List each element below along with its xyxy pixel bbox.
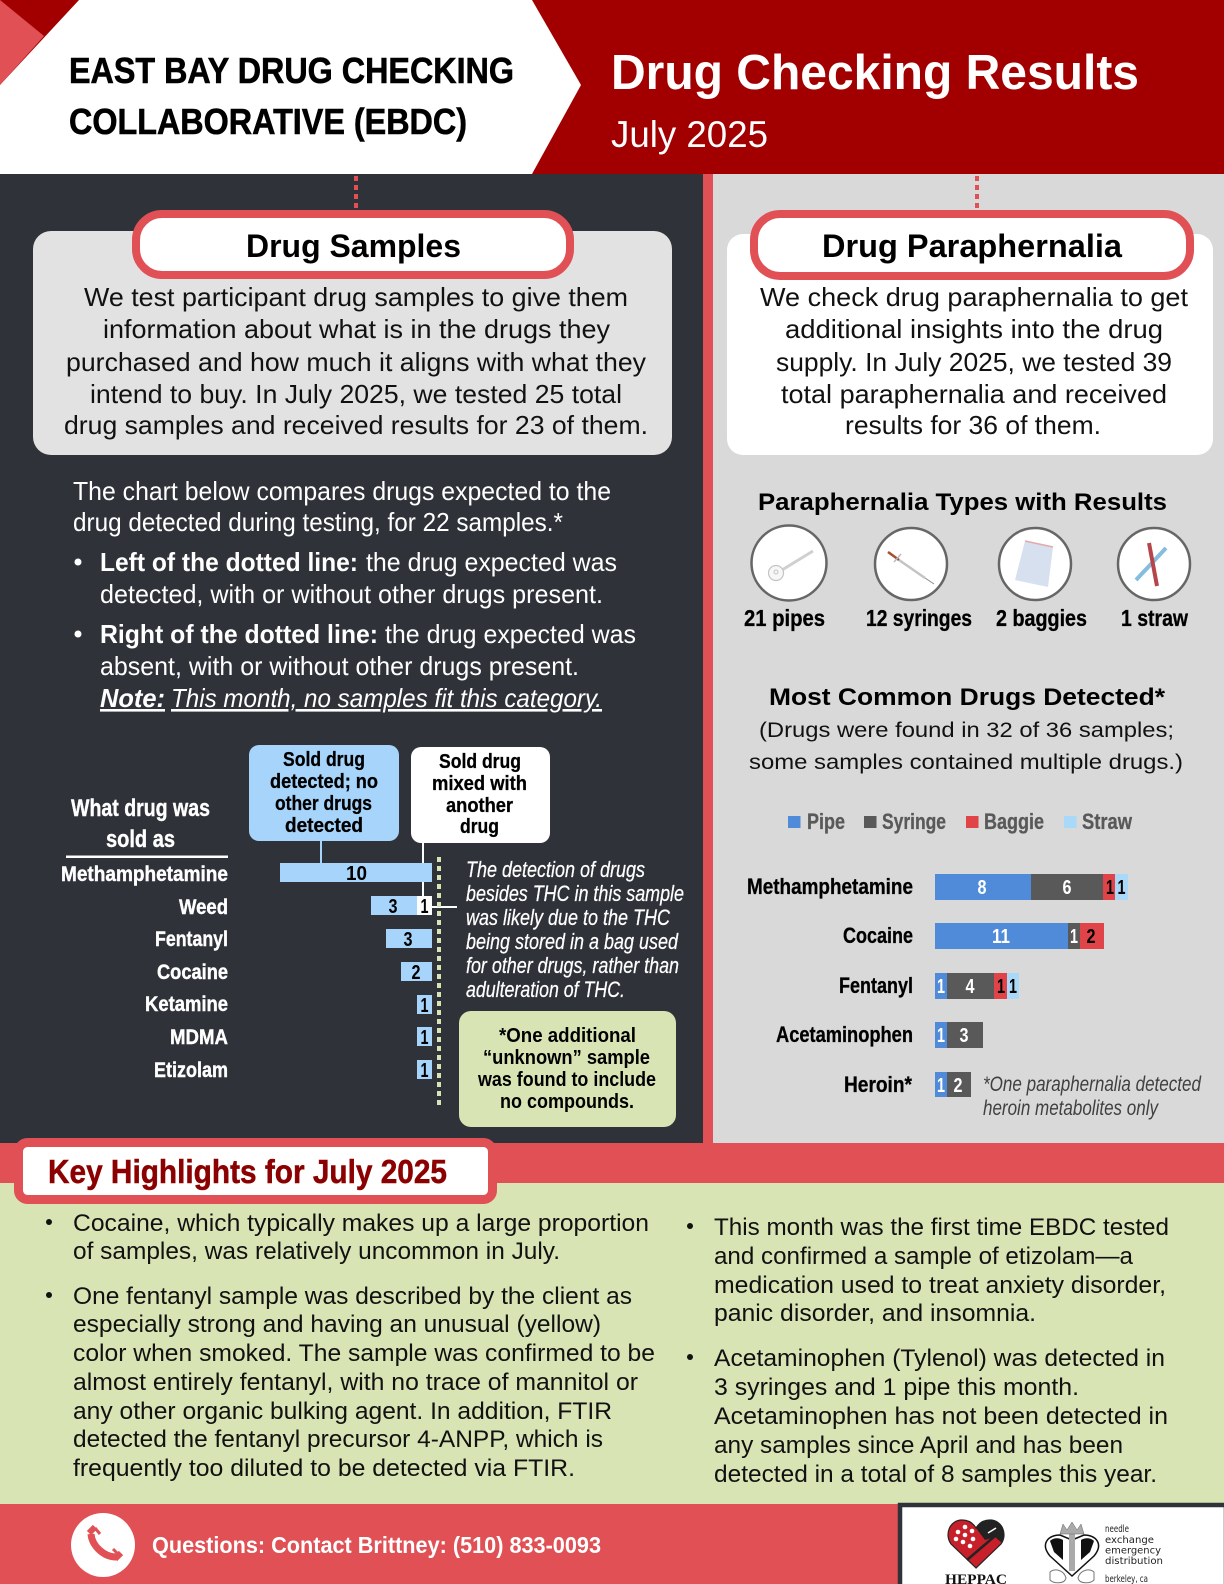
intro box: results for 36 of them. [845, 410, 1101, 440]
bar values: 1 [1009, 976, 1017, 998]
highlights left column: detected the fentanyl precursor 4-ANPP, which is [73, 1426, 603, 1453]
bar values: 1 [1106, 877, 1114, 899]
highlights left column: One fentanyl sample was described by the client as [73, 1283, 632, 1310]
highlights right column: 3 syringes and 1 pipe this month. [714, 1374, 1079, 1401]
stacked bar legend: Pipe [807, 809, 845, 834]
bar values: 3 [404, 929, 412, 951]
drug labels: Weed [179, 896, 228, 919]
drug labels: Methamphetamine [61, 863, 228, 886]
heading: drug samples: Drug Samples [246, 228, 461, 264]
highlights right column: and confirmed a sample of etizolam—a [714, 1243, 1133, 1270]
highlights right column: Acetaminophen has not been detected in [714, 1403, 1168, 1430]
highlights left column: any other organic bulking agent. In addition, FTIR [73, 1398, 612, 1425]
bar values [937, 877, 1126, 1097]
footnote callout: “unknown” sample [483, 1047, 650, 1069]
chart explanation text [73, 476, 636, 713]
row labels [747, 874, 913, 1097]
organization name: EAST BAY DRUG CHECKING [69, 50, 514, 91]
bars [280, 863, 432, 1079]
logo: needle exchange emblem [1045, 1522, 1099, 1583]
stacked bar legend: Straw [1082, 809, 1133, 834]
highlights left column: especially strong and having an unusual (yellow) [73, 1311, 601, 1338]
highlights right column: any samples since April and has been [714, 1432, 1123, 1459]
logo text: emergency [1105, 1546, 1161, 1556]
highlights left column: color when smoked. The sample was confirmed to be [73, 1340, 655, 1367]
bar values: 4 [966, 976, 975, 998]
panel: drug paraphernalia [713, 174, 1224, 1144]
icon: pipe [752, 526, 826, 600]
bar values: 11 [992, 926, 1010, 948]
bar values: 1 [1118, 877, 1126, 899]
paraphernalia counts: 2 baggies [996, 605, 1087, 631]
drug labels [61, 863, 228, 1082]
row labels: Heroin* [844, 1072, 912, 1097]
paraphernalia counts: 12 syringes [866, 605, 972, 631]
highlights right column: medication used to treat anxiety disorder, [714, 1272, 1166, 1299]
stacked bar legend: Baggie [984, 809, 1044, 834]
stacked bar legend: Syringe [882, 809, 946, 834]
drug labels: MDMA [170, 1026, 228, 1049]
intro box: additional insights into the drug [785, 314, 1163, 344]
chart explanation text: The chart below compares drugs expected to the [73, 476, 611, 506]
bar values: 1 [420, 896, 428, 918]
heroin footnote: heroin metabolites only [983, 1097, 1159, 1120]
row labels: Cocaine [843, 923, 913, 948]
heading: drug samples [136, 214, 570, 275]
highlights left column: almost entirely fentanyl, with no trace of mannitol or [73, 1369, 638, 1396]
stacked bar legend [788, 809, 1133, 834]
heading: paraphernalia types: Paraphernalia Types with Results [758, 489, 1167, 516]
highlights right column: panic disorder, and insomnia. [714, 1300, 1036, 1327]
heading: most common drugs: Most Common Drugs Detected* [769, 684, 1166, 711]
chart explanation text: Note: [100, 683, 165, 713]
heading: key highlights: Key Highlights for July 2025 [48, 1153, 447, 1190]
organization name: COLLABORATIVE (EBDC) [69, 101, 467, 142]
chart explanation text: Right of the dotted line: [100, 619, 378, 649]
row labels: Acetaminophen [776, 1022, 913, 1047]
paraphernalia counts: 21 pipes [744, 605, 825, 631]
chart note about THC: was likely due to the THC [466, 905, 670, 930]
contact text: Questions: Contact Brittney: (510) 833-0093 [152, 1532, 601, 1558]
bar values: 3 [388, 896, 398, 918]
row labels: Methamphetamine [747, 874, 913, 899]
header banner [0, 0, 1224, 174]
intro box: intend to buy. In July 2025, we tested 25 total [90, 379, 622, 409]
bar values: 1 [937, 1025, 945, 1047]
legend: sold drug mixed: drug [460, 816, 499, 838]
bar values: 6 [1062, 877, 1072, 899]
paraphernalia counts [744, 605, 1188, 631]
chart explanation text: Left of the dotted line: [100, 547, 358, 577]
legend: sold drug detected: detected [285, 815, 363, 837]
logo: HEPPAC [945, 1520, 1007, 1584]
logo text: exchange [1105, 1535, 1154, 1546]
intro box: information about what is in the drugs they [103, 314, 610, 344]
bar values: 1 [420, 995, 428, 1017]
icon: straw [1118, 528, 1190, 600]
heading: most common drugs [749, 684, 1183, 774]
bar values: 1 [937, 976, 945, 998]
legend: sold drug mixed: mixed with [432, 773, 527, 795]
bar values: 1 [937, 1075, 945, 1097]
heading: most common drugs: some samples contained multiple drugs.) [749, 750, 1183, 774]
intro box [33, 231, 672, 455]
bar values: 1 [420, 1027, 428, 1049]
chart explanation text: drug detected during testing, for 22 samples.* [73, 507, 563, 537]
icon: baggie [999, 528, 1071, 600]
bar values: 2 [1086, 926, 1096, 948]
drug labels: Etizolam [154, 1059, 228, 1082]
panel: drug samples [0, 174, 703, 1144]
divider band [703, 174, 713, 1144]
bar values: 8 [978, 877, 986, 899]
chart note about THC: being stored in a bag used [466, 929, 679, 954]
legend: sold drug detected: Sold drug [283, 749, 365, 771]
highlights right column [687, 1214, 1169, 1488]
axis heading [66, 795, 228, 858]
axis heading: sold as [106, 826, 175, 853]
highlights left column: of samples, was relatively uncommon in July. [73, 1238, 560, 1265]
legend: sold drug mixed: another [446, 795, 513, 817]
bar values: 2 [412, 962, 420, 984]
intro box: drug samples and received results for 23 of them. [64, 410, 648, 440]
intro box: total paraphernalia and received [781, 379, 1167, 409]
subtitle date: July 2025 [611, 114, 768, 155]
heroin footnote [983, 1073, 1202, 1120]
drug labels: Ketamine [145, 993, 228, 1016]
highlights right column: Acetaminophen (Tylenol) was detected in [714, 1345, 1165, 1372]
bar segments [935, 874, 1128, 1097]
highlights left column: Cocaine, which typically makes up a large proportion [73, 1210, 649, 1237]
intro box: supply. In July 2025, we tested 39 [776, 347, 1172, 377]
chart explanation text: detected, with or without other drugs present. [100, 579, 603, 609]
footnote callout: was found to include [477, 1069, 656, 1091]
bar values: 2 [954, 1075, 962, 1097]
bar values: 1 [1070, 926, 1078, 948]
footnote callout: no compounds. [500, 1091, 634, 1113]
chart explanation text: the drug expected was [366, 547, 617, 577]
partner logos [900, 1505, 1224, 1584]
bar values: 10 [346, 863, 367, 885]
panel: key highlights [0, 1142, 1224, 1504]
heading: drug paraphernalia [754, 214, 1190, 276]
chart note about THC: The detection of drugs [466, 857, 645, 882]
heading: drug paraphernalia: Drug Paraphernalia [822, 228, 1122, 264]
legend: sold drug detected: detected; no [270, 771, 378, 793]
logo text: distribution [1105, 1556, 1163, 1567]
chart note about THC [466, 857, 684, 1002]
intro box: We check drug paraphernalia to get [760, 282, 1189, 312]
paraphernalia counts: 1 straw [1121, 605, 1188, 631]
legend: sold drug detected: other drugs [275, 793, 372, 815]
intro box [727, 234, 1213, 455]
stacked bar chart [747, 874, 1128, 1097]
chart note about THC: adulteration of THC. [466, 977, 625, 1002]
highlights right column: This month was the first time EBDC tested [714, 1214, 1169, 1241]
logo text: needle [1105, 1524, 1129, 1535]
heading: most common drugs: (Drugs were found in 32 of 36 samples; [759, 718, 1174, 742]
highlights right column: detected in a total of 8 samples this year. [714, 1461, 1157, 1488]
icon: phone [71, 1513, 135, 1577]
bar values: 1 [997, 976, 1005, 998]
chart explanation text: This month, no samples fit this category. [171, 683, 602, 713]
legend: sold drug mixed: Sold drug [439, 751, 521, 773]
drug labels: Fentanyl [155, 928, 228, 951]
footnote callout: *One additional [499, 1025, 636, 1047]
bar chart: expected vs detected drugs [61, 745, 550, 1106]
footnote callout [459, 1011, 676, 1127]
chart explanation text: the drug expected was [385, 619, 636, 649]
logo text [1105, 1524, 1163, 1584]
footer [0, 1504, 1224, 1584]
highlights left column [46, 1210, 655, 1482]
intro box: purchased and how much it aligns with what they [66, 347, 646, 377]
heading: key highlights [18, 1142, 492, 1200]
organization name [69, 50, 514, 142]
legend: sold drug detected [249, 745, 399, 841]
chart explanation text: absent, with or without other drugs present. [100, 651, 579, 681]
axis heading: What drug was [71, 795, 210, 822]
title: Drug Checking Results [611, 46, 1139, 100]
bar values [346, 863, 428, 1082]
drug labels: Cocaine [157, 961, 228, 984]
row labels: Fentanyl [839, 973, 913, 998]
icon: syringe [875, 528, 947, 600]
bar values: 3 [960, 1025, 968, 1047]
chart note about THC: for other drugs, rather than [466, 953, 679, 978]
intro box: We test participant drug samples to give them [84, 282, 628, 312]
chart note about THC: besides THC in this sample [466, 881, 684, 906]
legend: sold drug mixed [411, 747, 550, 843]
highlights left column: frequently too diluted to be detected via FTIR. [73, 1455, 575, 1482]
bar values: 1 [420, 1060, 428, 1082]
